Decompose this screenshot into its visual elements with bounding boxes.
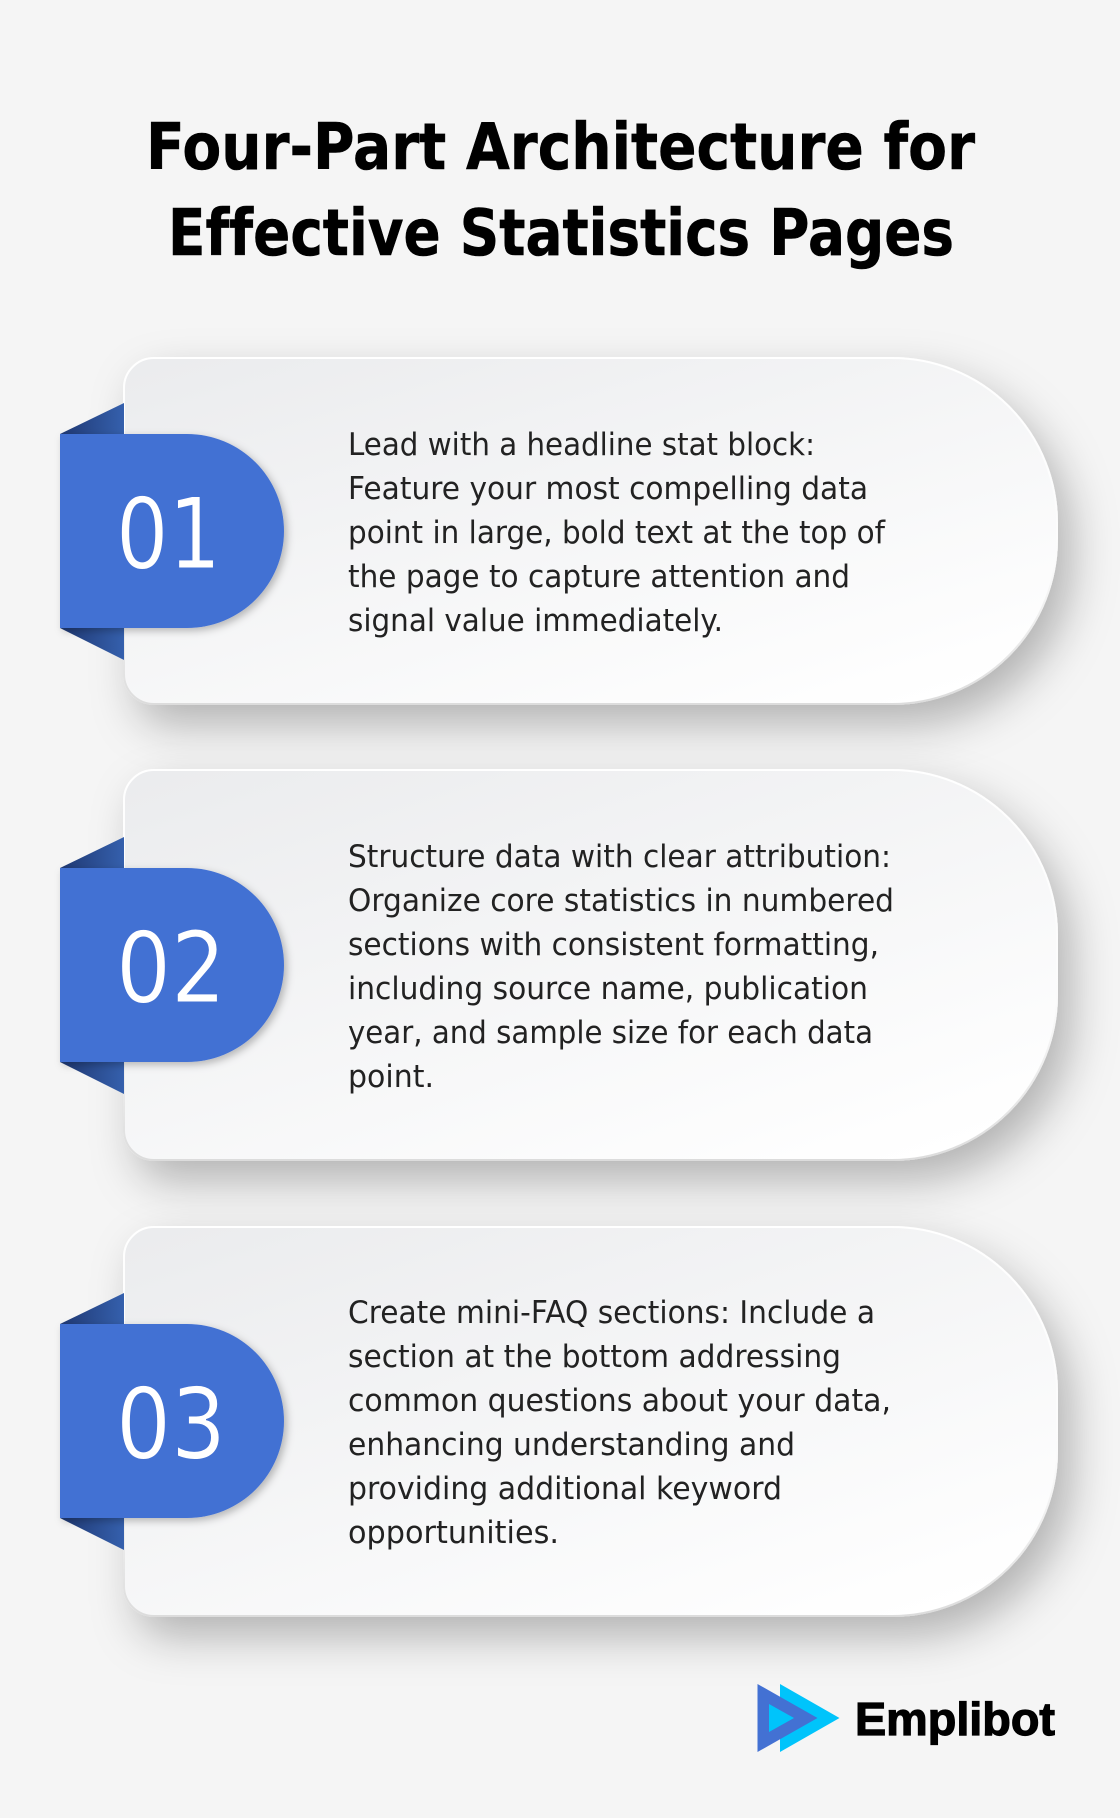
number 01: 01 [116,478,221,592]
icon: play triangles [758,1684,840,1752]
title: Four-Part Architecture for [146,111,975,185]
number badge [60,434,284,628]
step text [348,427,886,639]
number 02: 02 [116,912,226,1026]
title: Effective Statistics Pages [168,197,954,271]
step text: signal value immediately. [348,603,723,639]
step text: Feature your most compelling data [348,471,868,507]
number 03: 03 [116,1368,226,1482]
step text: year, and sample size for each data [348,1015,873,1051]
panel: step 01 [60,358,1057,704]
ribbon fold top [60,403,124,434]
title [146,111,975,271]
panel: step 03 [60,1227,1057,1616]
logo: Emplibot [758,1684,1055,1752]
ribbon fold bottom [60,1062,124,1094]
step text: providing additional keyword [348,1471,782,1507]
step text: opportunities. [348,1515,559,1551]
step text [348,839,894,1095]
step text: including source name, publication [348,971,868,1007]
wordmark: Emplibot [855,1693,1055,1745]
card background [124,770,1057,1160]
step text: Create mini-FAQ sections: Include a [348,1295,875,1331]
ribbon fold top [60,837,124,868]
step text: section at the bottom addressing [348,1339,841,1375]
step text: Structure data with clear attribution: [348,839,891,875]
ribbon fold bottom [60,1518,124,1550]
card background [124,358,1057,704]
step text: common questions about your data, [348,1383,891,1419]
step text: enhancing understanding and [348,1427,795,1463]
number badge [60,868,284,1062]
card background [124,1227,1057,1616]
panel: step 02 [60,770,1057,1160]
ribbon fold top [60,1293,124,1324]
step text: point in large, bold text at the top of [348,515,886,551]
step text: the page to capture attention and [348,559,850,595]
step text: Lead with a headline stat block: [348,427,815,463]
step text: Organize core statistics in numbered [348,883,894,919]
step text: sections with consistent formatting, [348,927,879,963]
step text [348,1295,891,1551]
number badge [60,1324,284,1518]
step text: point. [348,1059,434,1095]
ribbon fold bottom [60,628,124,660]
